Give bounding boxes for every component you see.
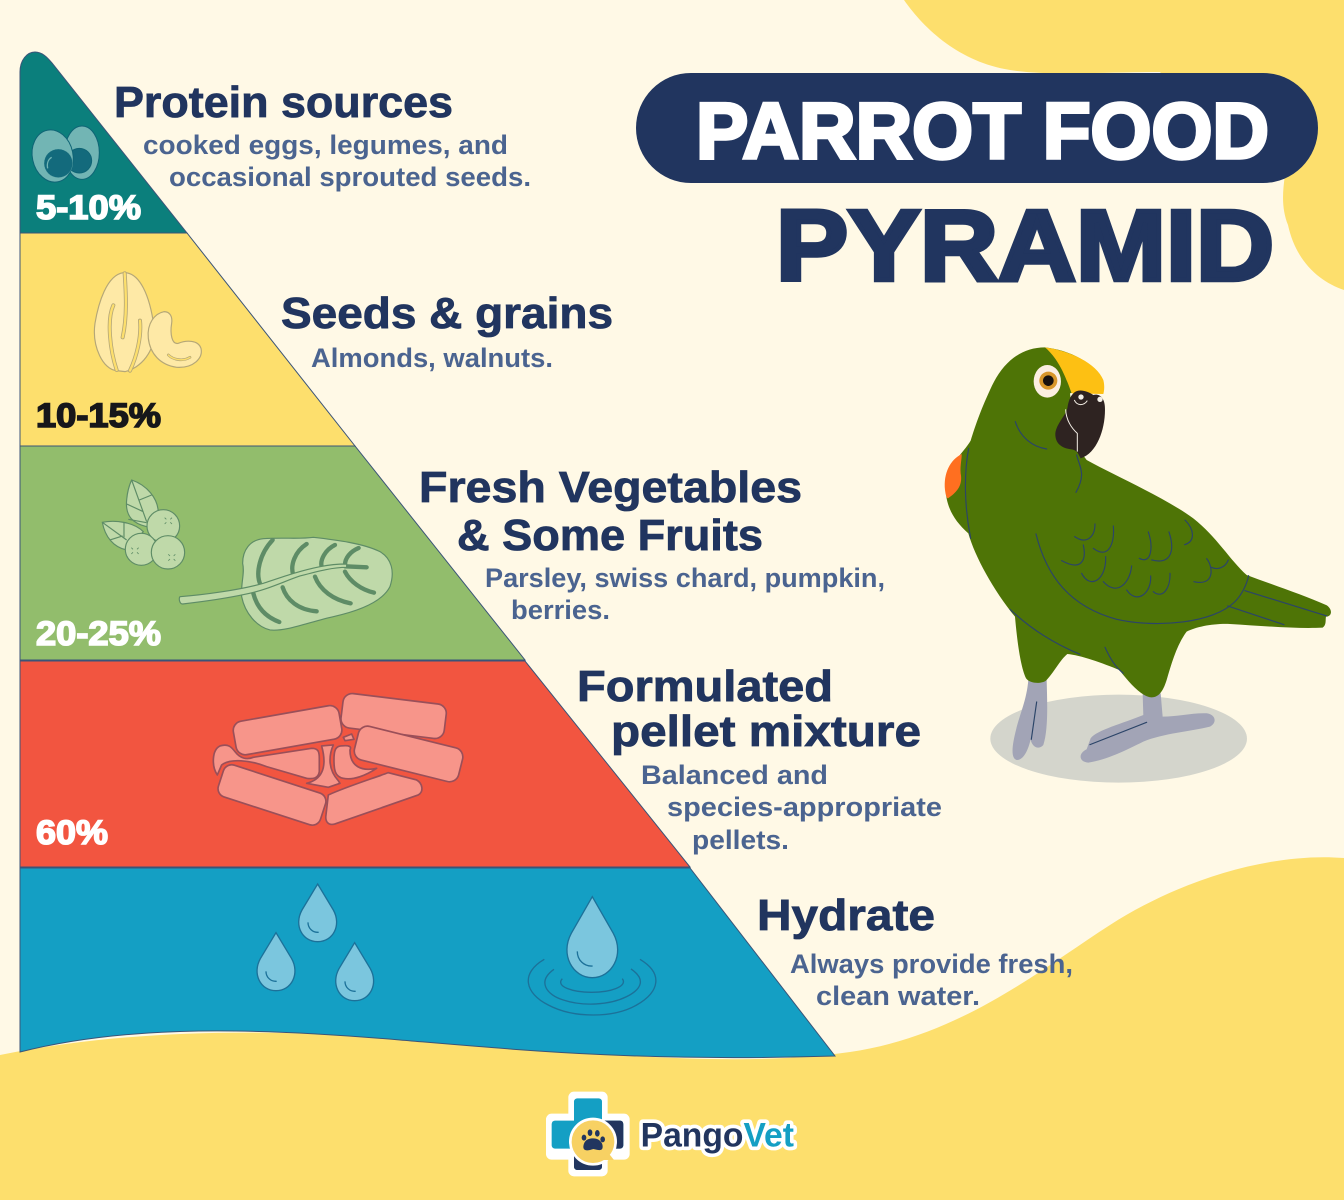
parrot forehead bbox=[1045, 347, 1104, 394]
text block: protein sources bbox=[114, 78, 531, 192]
text block: formulated pellet mixture bbox=[577, 662, 942, 855]
parrot shoulder patch bbox=[945, 454, 962, 498]
text block: protein sources: cooked eggs, legumes, and bbox=[143, 130, 508, 160]
parrot eye bbox=[1034, 365, 1061, 398]
ground shadow bbox=[990, 695, 1247, 783]
tier 1: protein bbox=[20, 52, 187, 233]
text block: seeds and grains: Almonds, walnuts. bbox=[311, 343, 553, 373]
background wave: bottom bbox=[0, 857, 1344, 1200]
text block: hydrate: Always provide fresh, bbox=[790, 949, 1073, 979]
parrot body bbox=[945, 347, 1331, 697]
food pyramid bbox=[20, 52, 835, 1058]
text block: vegetables and fruits bbox=[419, 463, 885, 625]
text block: vegetables and fruits: Fresh Vegetables bbox=[419, 463, 802, 512]
title line 1: PARROT FOOD bbox=[696, 86, 1269, 175]
tier 5: water bbox=[20, 868, 835, 1058]
text block: formulated pellet mixture: pellets. bbox=[692, 825, 789, 855]
title line 2: PYRAMID bbox=[776, 190, 1274, 302]
background blob: top right bbox=[904, 0, 1344, 290]
text block: formulated pellet mixture: Formulated bbox=[577, 662, 833, 711]
text block: hydrate: clean water. bbox=[816, 981, 980, 1011]
PangoVet logo bbox=[552, 1097, 794, 1171]
tier 4: pellets bbox=[20, 661, 690, 867]
label: 60%: 60% bbox=[36, 814, 108, 852]
label: 5-10%: 5-10% bbox=[36, 189, 141, 227]
tier 2: seeds bbox=[20, 233, 355, 446]
parrot illustration bbox=[945, 347, 1331, 783]
icon: eggs bbox=[27, 126, 99, 186]
icon: water drop with ripples bbox=[528, 897, 656, 1015]
icon: pellets bbox=[213, 692, 465, 827]
logo wordmark: PangoVet bbox=[641, 1117, 794, 1155]
text block: protein sources: occasional sprouted seeds. bbox=[169, 162, 531, 192]
text block: protein sources: Protein sources bbox=[114, 78, 453, 127]
text block: hydrate bbox=[757, 891, 1073, 1011]
text block: seeds and grains: Seeds & grains bbox=[281, 289, 613, 338]
label: 10-15%: 10-15% bbox=[36, 397, 161, 435]
percent labels bbox=[36, 189, 161, 852]
title bbox=[636, 73, 1318, 302]
label: 20-25%: 20-25% bbox=[36, 615, 161, 653]
text block: formulated pellet mixture: pellet mixture bbox=[611, 707, 921, 756]
logo icon bbox=[552, 1097, 624, 1171]
text block: formulated pellet mixture: Balanced and bbox=[641, 760, 828, 790]
icon: berries and small leaves bbox=[102, 480, 185, 569]
tier 3: vegetables bbox=[20, 446, 525, 660]
icon: almond and cashew bbox=[94, 273, 201, 372]
text block: formulated pellet mixture: species-appropriate bbox=[667, 792, 942, 822]
text block: hydrate: Hydrate bbox=[757, 891, 935, 940]
title pill bbox=[636, 73, 1318, 183]
text block: vegetables and fruits: Parsley, swiss chard, pumpkin, bbox=[485, 563, 885, 593]
text block: vegetables and fruits: & Some Fruits bbox=[457, 511, 763, 560]
icon: three water drops bbox=[257, 884, 374, 1001]
parrot legs and feet bbox=[1013, 680, 1215, 763]
icon: leafy green bbox=[179, 537, 392, 630]
parrot beak bbox=[1055, 391, 1105, 458]
text block: vegetables and fruits: berries. bbox=[511, 595, 610, 625]
text block: seeds and grains bbox=[281, 289, 613, 373]
parrot feather lines bbox=[965, 422, 1327, 745]
